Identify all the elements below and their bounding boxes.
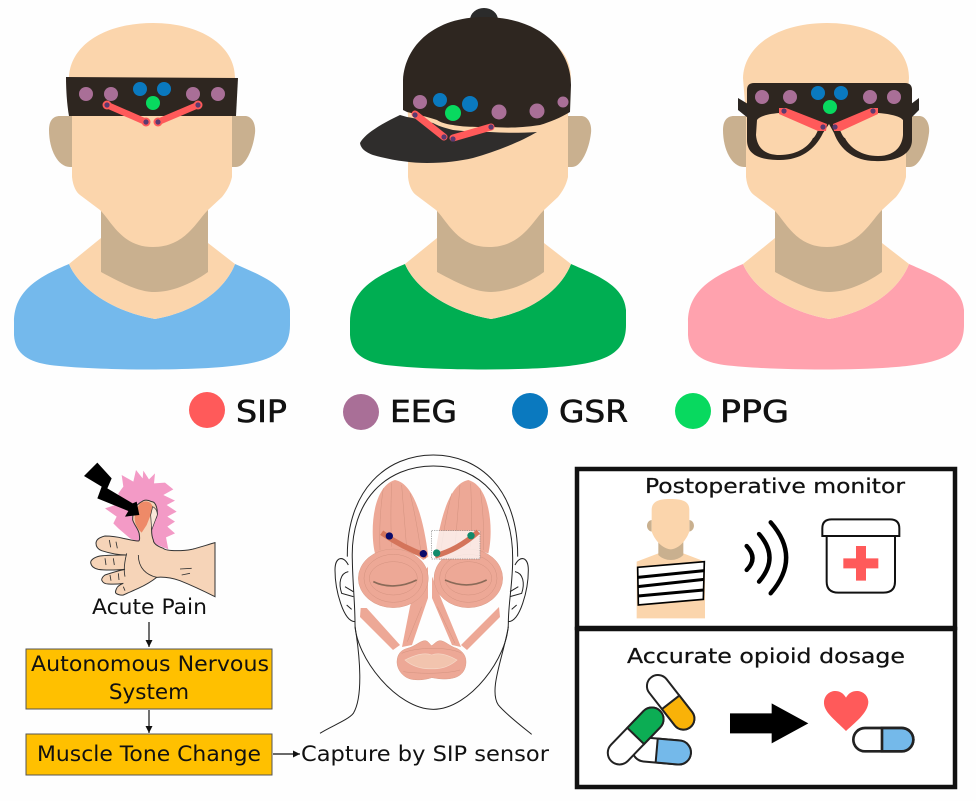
nasal muscles — [402, 567, 461, 647]
closed eyes — [373, 580, 487, 586]
arrow: dosage result — [730, 703, 808, 743]
shirt: pink — [688, 264, 964, 370]
legend: GSR: GSR — [559, 395, 628, 430]
EEG electrodes — [755, 90, 901, 104]
electrodes left — [386, 532, 427, 557]
neck and collar skin — [69, 238, 235, 319]
box: muscle tone change — [26, 734, 272, 775]
mouth muscle — [397, 641, 466, 680]
heading: Accurate opioid dosage — [627, 644, 905, 668]
neck shadow — [775, 205, 882, 292]
thumb nail — [151, 507, 157, 530]
legend: SIP — [189, 392, 287, 430]
pain bolt arrow — [84, 463, 139, 517]
cap dome — [403, 17, 571, 128]
box: muscle tone change: Muscle Tone Change — [37, 742, 261, 767]
EEG electrodes — [79, 87, 225, 101]
neck shadow — [101, 205, 208, 292]
pill: orange — [643, 671, 699, 734]
icon: bandaged patient — [637, 499, 705, 618]
SIP sensors — [412, 112, 494, 142]
head — [743, 23, 909, 247]
SIP sensors — [102, 100, 202, 126]
arrow: nervous system to muscle tone — [148, 710, 150, 733]
legend — [189, 392, 789, 430]
hand creases — [105, 540, 192, 591]
PPG sensor — [823, 100, 837, 114]
headband — [66, 77, 238, 116]
box: autonomous nervous system: System — [109, 680, 189, 705]
head — [405, 23, 571, 247]
figure: person with cap — [350, 8, 626, 370]
head outline — [320, 455, 532, 734]
legend: PPG: PPG — [720, 395, 789, 430]
neck shadow — [437, 205, 544, 292]
cheek muscles — [360, 607, 500, 650]
PPG sensor — [146, 96, 160, 110]
icon: heart — [824, 691, 868, 731]
corrugator muscle right — [435, 532, 478, 556]
corrugator muscle left — [382, 533, 427, 556]
panel: postoperative monitor — [577, 469, 955, 628]
neck and collar skin — [405, 238, 571, 319]
shirt: blue — [14, 264, 290, 370]
diagram: facial muscles — [320, 455, 532, 734]
EEG electrodes — [413, 95, 568, 120]
box: autonomous nervous system: Autonomous Nervous — [31, 652, 269, 677]
icon: medical kit — [822, 519, 899, 593]
SIP sensors — [779, 108, 878, 131]
head — [69, 23, 235, 247]
legend: PPG — [675, 393, 789, 430]
pain burst — [105, 470, 177, 549]
GSR electrodes — [133, 82, 171, 96]
icon: wireless signal — [747, 522, 786, 593]
frontalis muscles — [373, 480, 491, 560]
injured thumb tip — [135, 501, 153, 533]
panel: accurate opioid dosage — [577, 629, 955, 787]
figure: person with glasses — [688, 23, 964, 370]
legend: GSR — [512, 393, 628, 430]
ears — [49, 116, 255, 167]
box: autonomous nervous system — [26, 649, 272, 709]
label: acute pain: Acute Pain — [92, 595, 207, 620]
GSR electrodes — [811, 86, 848, 100]
hand — [91, 500, 215, 597]
shirt: green — [350, 264, 626, 370]
electrodes right — [433, 532, 475, 557]
PPG sensor — [445, 105, 461, 121]
arrow: pain to nervous system — [148, 622, 150, 647]
icon: pills — [603, 671, 699, 769]
orbicularis eye muscles — [358, 549, 503, 608]
ears — [723, 116, 929, 167]
pill: green — [603, 703, 668, 769]
cap visor — [360, 115, 537, 163]
muscle fibres — [364, 483, 497, 673]
icon: single capsule — [853, 728, 913, 751]
neck and collar skin — [743, 238, 909, 319]
pill: blue — [631, 736, 692, 766]
glasses frame — [747, 83, 912, 161]
legend: SIP: SIP — [236, 395, 287, 430]
legend: EEG: EEG — [390, 395, 457, 430]
glasses temples — [738, 98, 919, 118]
icon: hand with acute pain — [84, 463, 215, 597]
label: capture by SIP sensor: Capture by SIP sensor — [301, 742, 549, 767]
ear — [568, 116, 591, 167]
legend: EEG — [343, 394, 457, 430]
glasses lenses — [756, 113, 903, 156]
cap button — [470, 8, 498, 32]
arrow: muscle tone to capture — [273, 753, 300, 755]
lips — [405, 654, 457, 669]
figure: person with headband — [14, 23, 290, 370]
heading: Postoperative monitor — [645, 474, 906, 498]
highlight box — [432, 531, 480, 559]
GSR electrodes — [433, 93, 478, 112]
